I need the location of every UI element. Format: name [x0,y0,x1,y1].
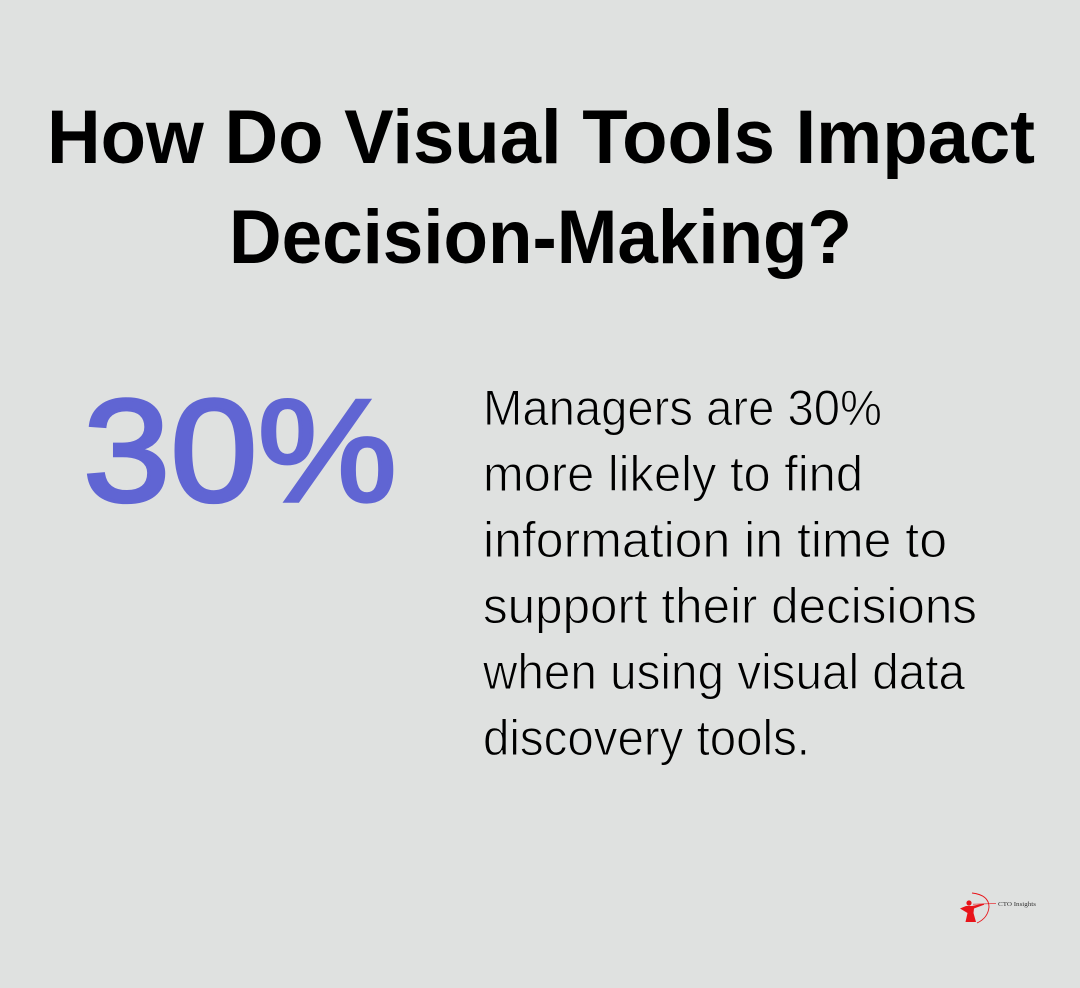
title: How Do Visual Tools Impact [47,95,1035,180]
description text: discovery tools. [483,710,810,766]
logo: CTO Insights archer [960,893,1037,923]
icon: red archer [960,893,996,923]
title [47,95,1035,280]
description text: support their decisions [483,578,977,634]
title: Decision-Making? [229,195,852,280]
description text: Managers are 30% [483,380,882,436]
big statistic: 30%: 30% [83,369,397,532]
description text [482,380,977,766]
description text: information in time to [483,512,947,568]
description text: more likely to find [483,446,863,502]
description text: when using visual data [482,644,965,700]
logo wordmark: CTO Insights [998,901,1037,908]
